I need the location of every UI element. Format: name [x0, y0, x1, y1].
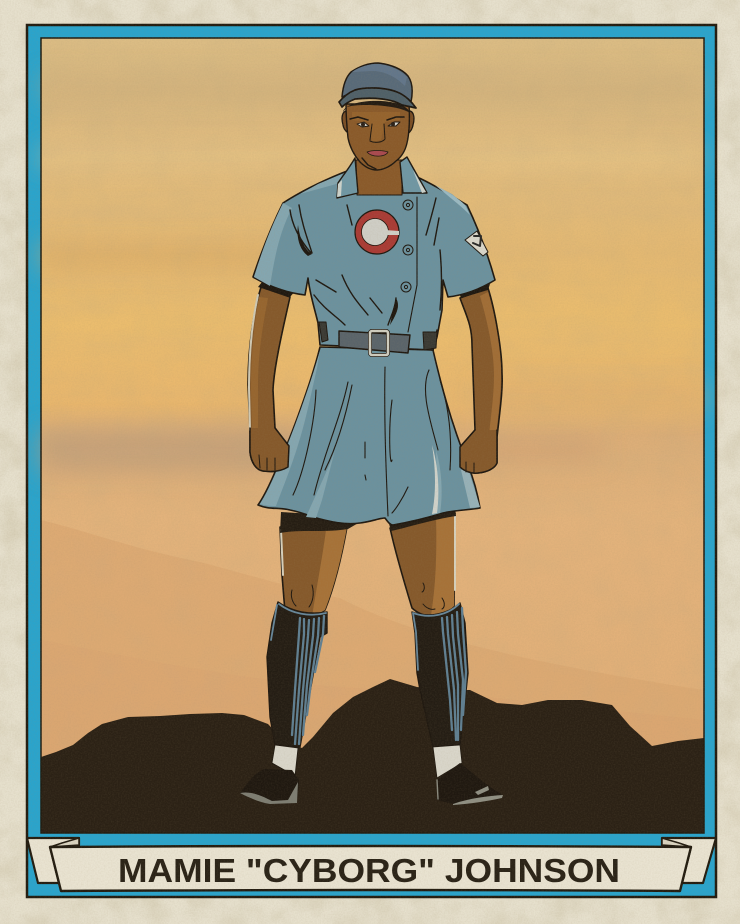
player name: MAMIE "CYBORG" JOHNSON — [118, 852, 620, 889]
buttons — [401, 200, 413, 292]
left ribbon tail — [27, 838, 79, 883]
left arm — [248, 282, 296, 472]
right ribbon tail — [662, 838, 716, 883]
nose — [370, 124, 385, 142]
sky streaks — [41, 38, 704, 518]
haze bands — [40, 75, 704, 472]
sunset sky scene — [40, 38, 704, 833]
cap — [339, 63, 416, 108]
right arm — [458, 284, 502, 473]
right leg — [390, 513, 455, 616]
head — [342, 101, 414, 170]
main ribbon — [50, 846, 691, 891]
sleeve patch — [465, 231, 488, 256]
right shoe — [437, 763, 503, 805]
right sock — [412, 603, 468, 747]
blue strip under picture — [42, 834, 703, 847]
left sock — [267, 602, 327, 747]
fists over skirt — [250, 428, 497, 473]
left leg — [280, 527, 347, 617]
name banner — [27, 838, 716, 891]
left shoe — [240, 769, 299, 804]
chest C emblem — [355, 210, 399, 254]
sleeve highlights — [254, 174, 465, 286]
ears — [342, 111, 414, 134]
white ankle socks — [272, 745, 462, 778]
shirt — [253, 168, 495, 350]
distant hill layers — [41, 520, 704, 760]
placket — [408, 197, 417, 332]
face — [346, 104, 409, 170]
hair band — [343, 101, 410, 113]
dark shorts — [280, 508, 456, 533]
belt and buckle — [319, 322, 437, 355]
dark rocky hill silhouette — [41, 679, 704, 833]
collar and neck — [337, 157, 427, 198]
eyes and brows — [350, 117, 404, 120]
player figure — [240, 63, 503, 805]
wrinkles — [290, 198, 442, 345]
lips — [367, 150, 388, 156]
picture inner keyline — [41, 38, 704, 833]
skirt — [258, 347, 480, 525]
